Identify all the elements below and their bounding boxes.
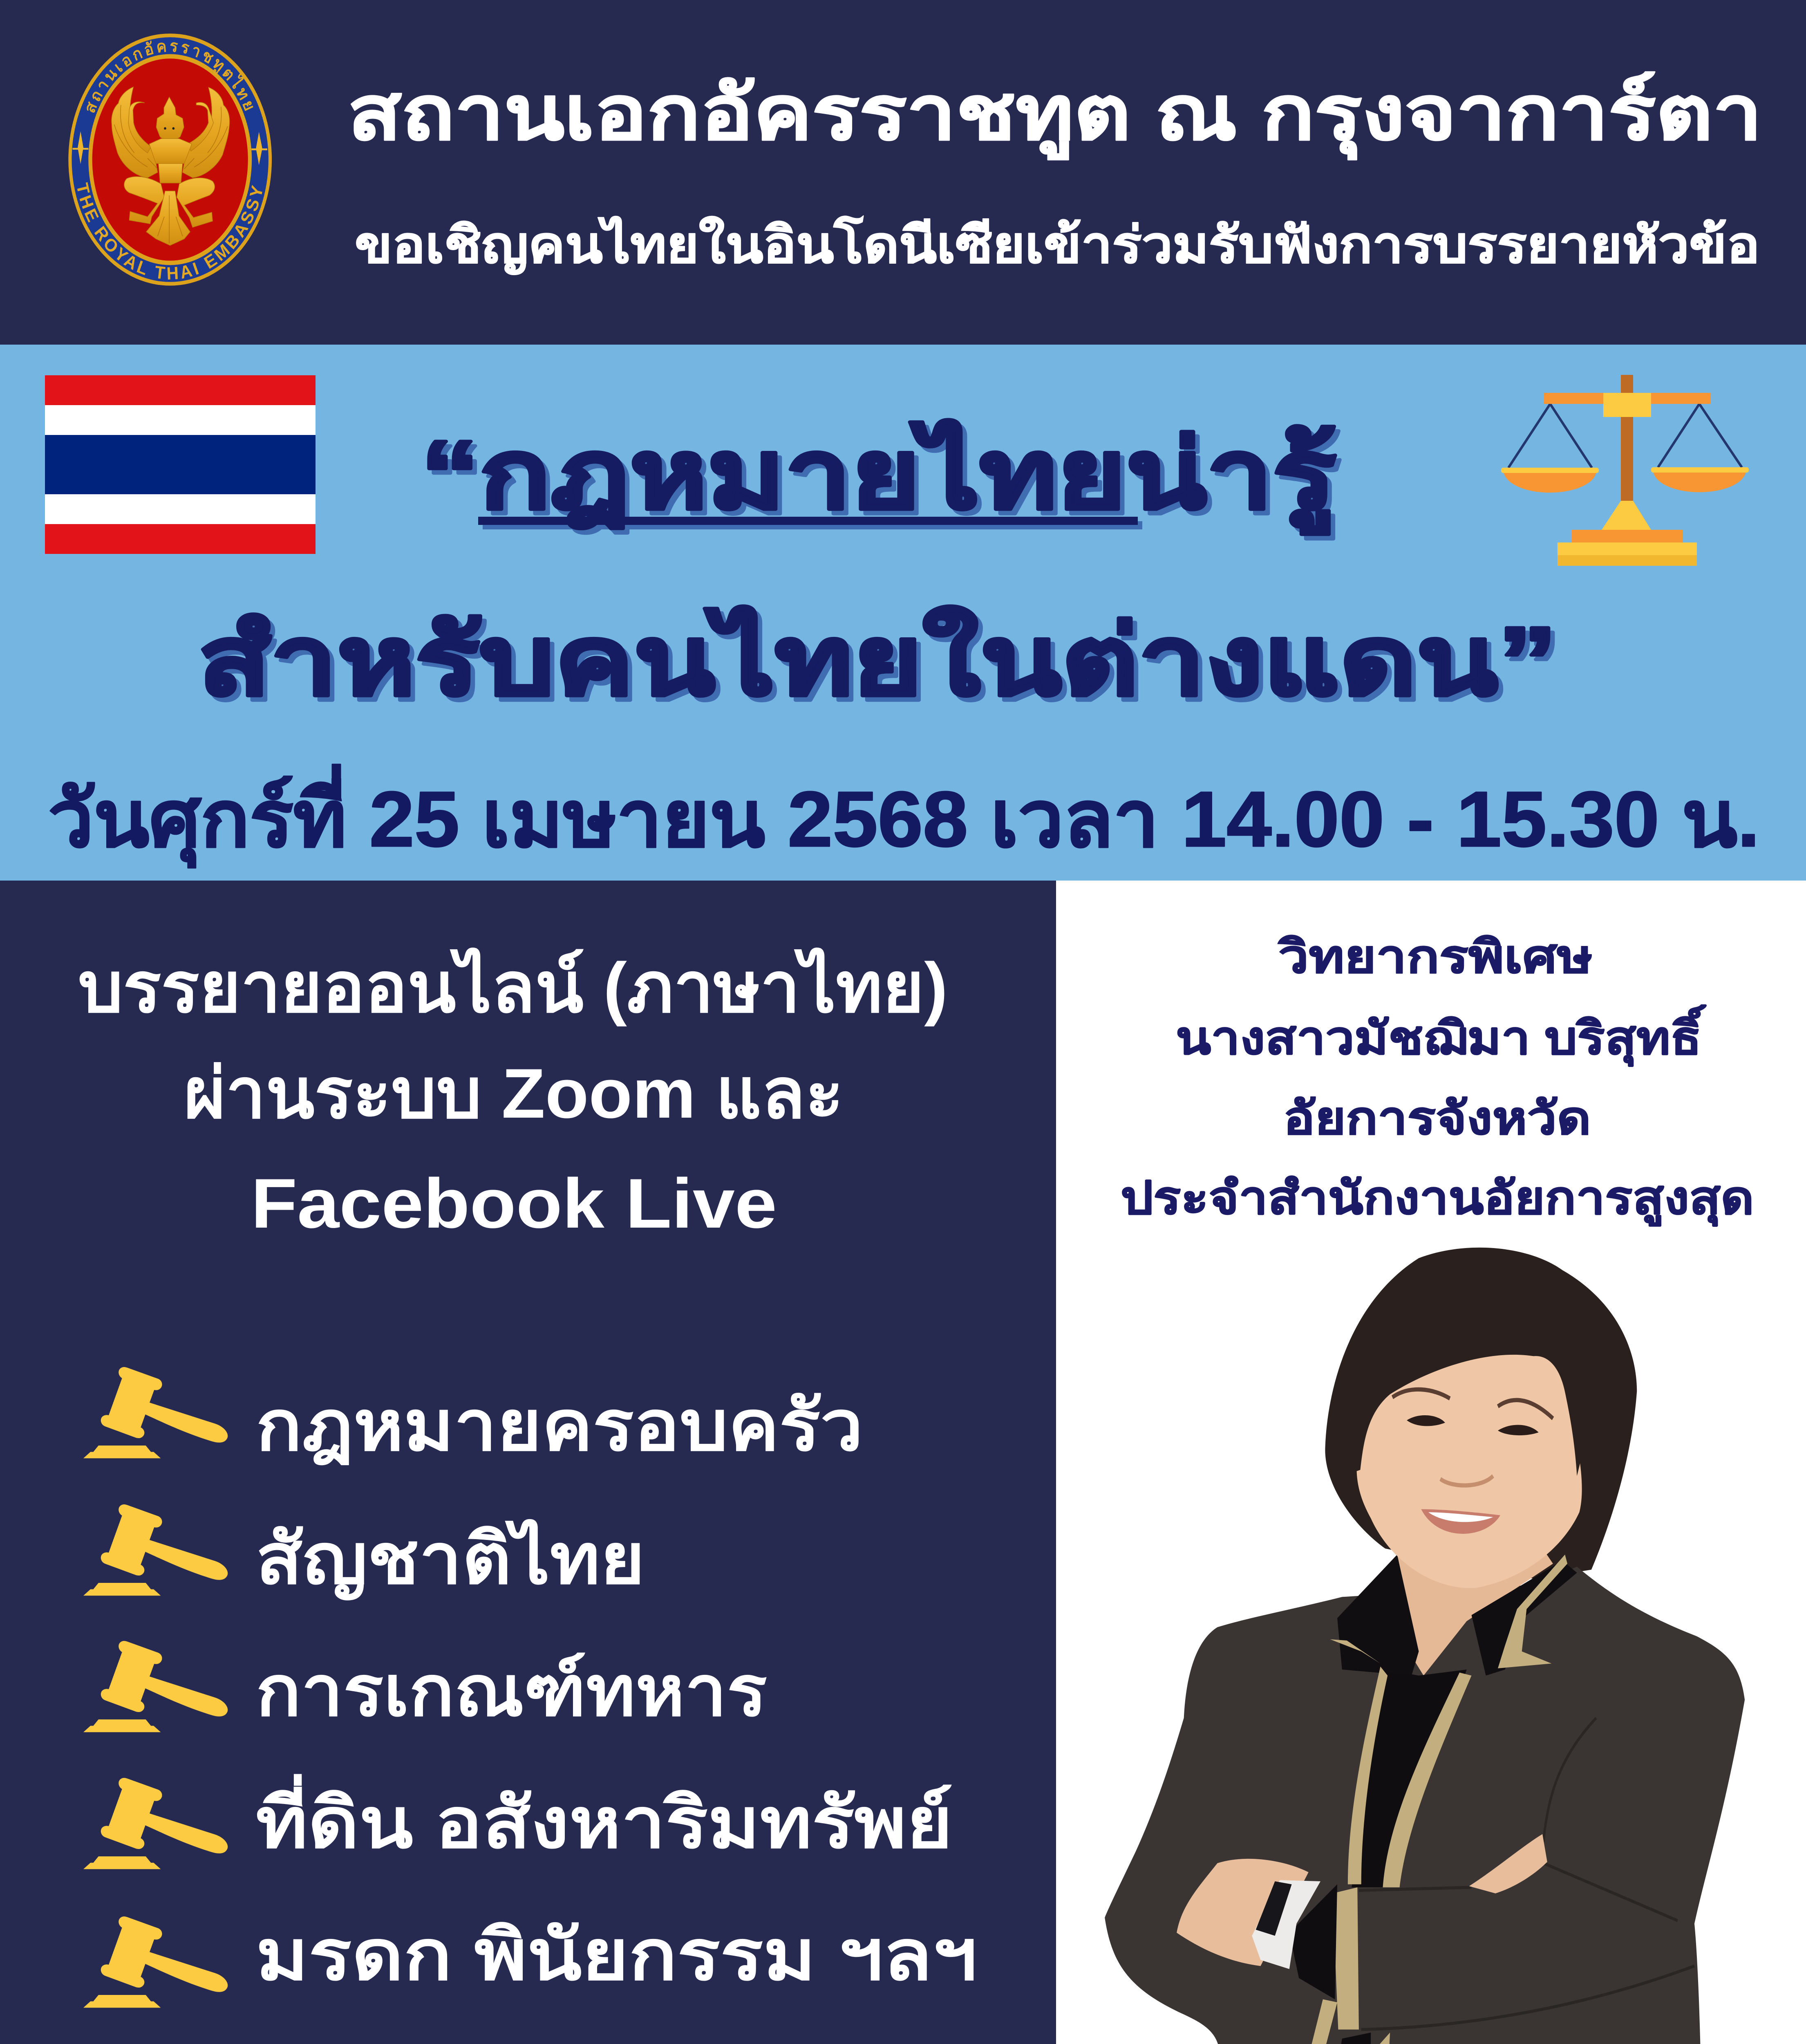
neck — [1390, 1542, 1553, 1676]
header band — [0, 0, 1806, 345]
subheading: invitation: ขอเชิญคนไทยในอินโดนีเซียเข้าร่วมรับฟังการบรรยายหัวข้อ — [355, 216, 1760, 275]
crossed hand — [1177, 1834, 1547, 1966]
date and time: วันศุกร์ที่ 25 เมษายน 2568 เวลา 14.00 - 15.30 น. — [48, 764, 1760, 868]
topic: military conscription: การเกณฑ์ทหาร — [256, 1652, 767, 1730]
text block: guest speaker: นางสาวมัชฌิมา บริสุทธิ์ — [1176, 1004, 1707, 1067]
eyes — [1407, 1415, 1539, 1435]
topic: family law: กฎหมายครอบครัว — [256, 1387, 863, 1466]
nose — [1440, 1476, 1493, 1486]
icon: gavel 4 — [83, 1778, 228, 1869]
topic: inheritance and wills: มรดก พินัยกรรม ฯลฯ — [256, 1916, 977, 1995]
text block: lecture format: Facebook Live — [251, 1164, 777, 1243]
jacket sleeve folds — [1220, 1718, 1694, 2044]
sleeve cuff — [1289, 1884, 1337, 1999]
icon: Royal Thai Embassy seal: THE ROYAL THAI EMBASSY — [73, 181, 267, 283]
heading: lecture title: สำหรับคนไทยในต่างแดน” — [198, 606, 1557, 715]
face — [1357, 1336, 1582, 1588]
text block: guest speaker: ประจำสำนักงานอัยการสูงสุด — [1121, 1172, 1754, 1227]
topic: Thai nationality: สัญชาติไทย — [256, 1519, 645, 1600]
jacket — [1105, 1567, 1745, 2044]
text block: guest speaker: วิทยากรพิเศษ — [1278, 931, 1593, 982]
heading: embassy name: สถานเอกอัครราชทูต ณ กรุงจาการ์ตา — [348, 71, 1762, 160]
garuda emblem — [112, 87, 230, 245]
topics panel background — [0, 881, 1056, 2044]
icon: gavel 2 — [83, 1504, 228, 1596]
icon: gavel 3 — [83, 1641, 228, 1732]
icon: Thai flag — [45, 375, 316, 554]
smile — [1421, 1509, 1500, 1534]
text block: guest speaker: อัยการจังหวัด — [1283, 1093, 1591, 1144]
photo: speaker portrait — [1105, 1248, 1745, 2044]
watch — [1252, 1880, 1320, 1969]
icon: Royal Thai Embassy seal — [68, 34, 272, 286]
text block: guest speaker — [1121, 931, 1754, 1227]
collar — [1337, 1555, 1577, 1676]
speaker panel background — [1056, 881, 1806, 2044]
heading: lecture title: “กฎหมายไทยน่ารู้ — [421, 419, 1336, 535]
shirt — [1328, 1670, 1467, 2044]
icon: Royal Thai Embassy seal: สถานเอกอัครราชทูตไทย — [81, 37, 259, 116]
date and title band — [0, 345, 1806, 881]
text block: lecture format: ผ่านระบบ Zoom และ — [184, 1054, 844, 1133]
topic: land and real estate: ที่ดิน อสังหาริมทรัพย์ — [256, 1774, 953, 1862]
icon: gavel 1 — [83, 1367, 228, 1458]
text block: lecture format — [78, 948, 948, 1243]
topic list — [83, 1367, 977, 2008]
heading: lecture title — [198, 419, 1557, 715]
text block: lecture format: บรรยายออนไลน์ (ภาษาไทย) — [78, 948, 948, 1027]
icon: gavel 5 — [83, 1916, 228, 2008]
hair fringe — [1337, 1258, 1601, 1476]
tan trim — [1309, 1555, 1685, 2044]
hair back — [1325, 1248, 1637, 1579]
icon: scales of justice — [1501, 375, 1749, 566]
eyebrows — [1392, 1390, 1553, 1419]
